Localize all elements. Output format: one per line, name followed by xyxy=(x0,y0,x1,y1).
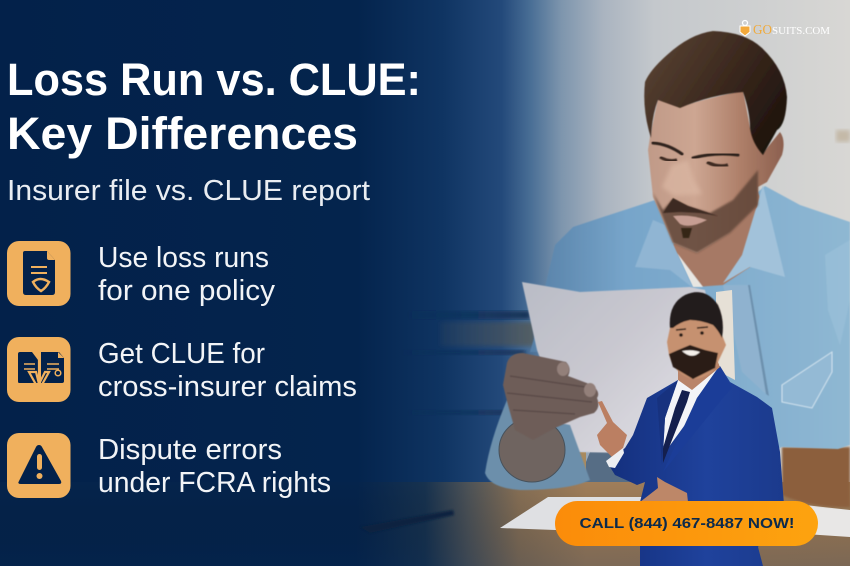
text: dispute errors: Dispute errors xyxy=(98,434,282,466)
man's face xyxy=(648,90,784,253)
call to action button: CALL (844) 467-8487 NOW! xyxy=(580,516,794,532)
wrist xyxy=(499,418,565,482)
shirt and tie xyxy=(657,365,732,472)
logo: GoSuits.com: GO xyxy=(753,23,772,38)
text: use loss runs: for one policy xyxy=(98,275,276,307)
lawyer figure xyxy=(597,292,784,566)
text: get CLUE: cross-insurer claims xyxy=(98,371,357,403)
man's hand holding paper xyxy=(485,353,598,490)
text: dispute errors: under FCRA rights xyxy=(98,467,331,499)
text: use loss runs xyxy=(98,242,276,307)
icon: logo lock xyxy=(740,20,750,36)
cuff xyxy=(485,400,590,490)
suit xyxy=(607,366,784,566)
list item: get CLUE xyxy=(7,337,357,403)
fingers xyxy=(503,353,598,440)
logo: GoSuits.com xyxy=(740,20,831,38)
lower hand xyxy=(640,477,688,502)
man's denim shirt xyxy=(530,186,850,452)
call to action button xyxy=(555,501,818,546)
text: dispute errors xyxy=(98,434,331,499)
icon: warning triangle xyxy=(7,433,70,498)
table xyxy=(0,482,850,566)
subtitle: Insurer file vs. CLUE report xyxy=(7,175,370,207)
list item: dispute errors xyxy=(7,433,331,499)
neck xyxy=(678,360,720,390)
text: get CLUE xyxy=(98,338,357,403)
list item: use loss runs xyxy=(7,241,276,307)
icon: document with shield xyxy=(7,241,70,306)
man's hair xyxy=(644,31,787,155)
man's collar xyxy=(635,185,785,288)
title: Key Differences xyxy=(7,108,358,159)
cuff xyxy=(606,448,624,468)
pointing hand xyxy=(597,401,627,458)
undershirt behind lawyer xyxy=(716,290,735,380)
text: get CLUE: Get CLUE for xyxy=(98,338,265,370)
logo: GoSuits.com: SUITS.COM xyxy=(772,26,831,37)
man's neck and undershirt xyxy=(672,190,763,287)
head xyxy=(667,292,726,379)
laptop behind paper xyxy=(578,452,640,482)
icon: two documents with arrow xyxy=(7,337,70,402)
man's forearm xyxy=(782,447,850,507)
held paper xyxy=(522,282,725,455)
title xyxy=(7,54,421,159)
text: use loss runs: Use loss runs xyxy=(98,242,269,274)
title: Loss Run vs. CLUE: xyxy=(7,54,421,105)
